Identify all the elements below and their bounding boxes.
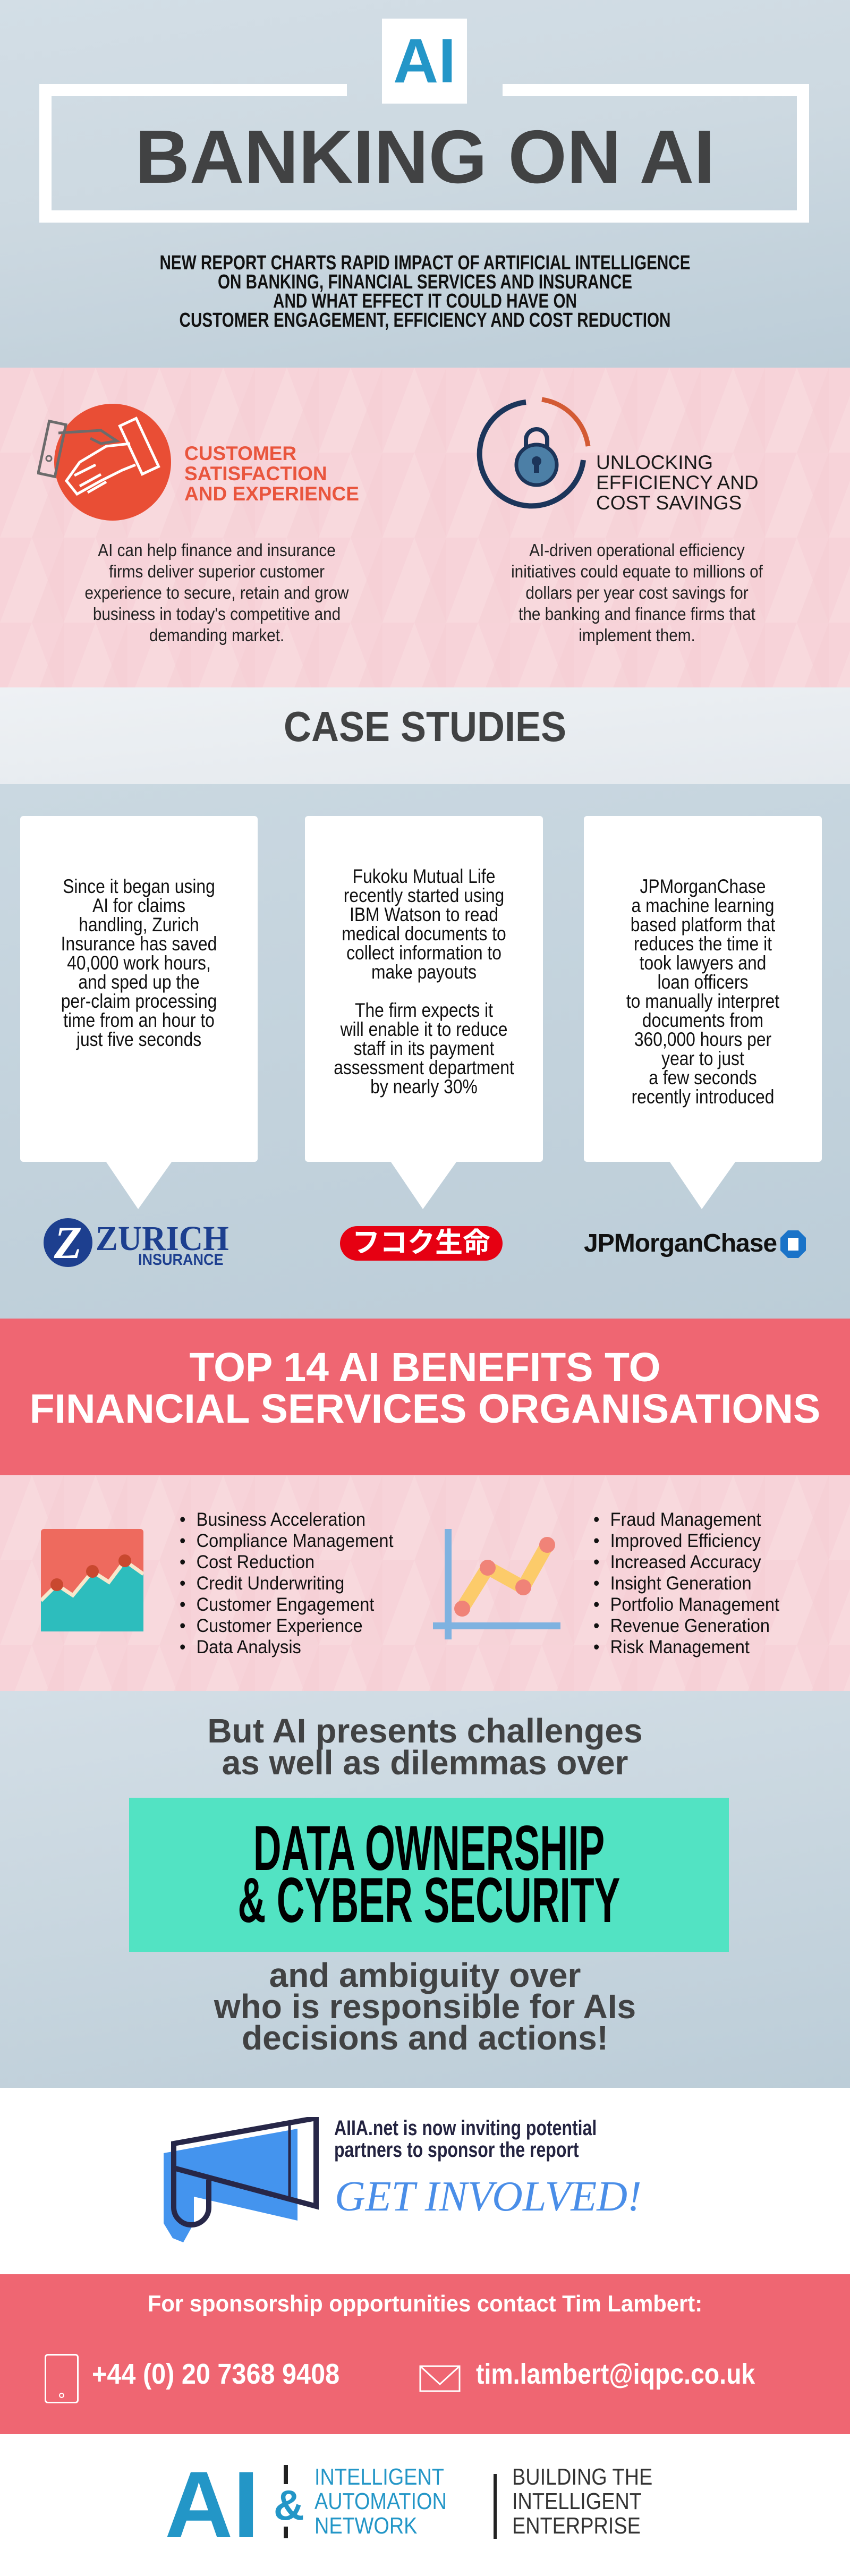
text: fukoku case: assessment department: [334, 1057, 514, 1078]
text: sponsor invite: AIIA.net is now inviting potential: [334, 2116, 597, 2140]
text: customer body: demanding market.: [149, 625, 284, 645]
logo: intelligent automation network: &: [274, 2481, 304, 2529]
list: benefits right: •: [593, 1616, 599, 1636]
text: get involved: GET INVOLVED!: [335, 2173, 642, 2220]
text: fukoku case: IBM Watson to read: [350, 904, 498, 925]
text: sponsor invite: partners to sponsor the report: [334, 2138, 579, 2162]
text: zurich case: time from an hour to: [63, 1009, 215, 1031]
text: zurich case: AI for claims: [92, 895, 185, 916]
text: customer body: business in today's competitive and: [93, 604, 341, 624]
heading: unlocking efficiency: [596, 452, 759, 514]
text: jpmorgan case: took lawyers and: [640, 952, 766, 974]
text: zurich case: [61, 875, 217, 1050]
list: benefits right: Portfolio Management: [610, 1594, 779, 1615]
text: efficiency body: [511, 540, 763, 645]
list: benefits right: •: [593, 1637, 599, 1657]
heading: top 14 benefits: FINANCIAL SERVICES ORGANISATIONS: [30, 1386, 820, 1432]
text: challenges outro: who is responsible for AIs: [214, 1987, 636, 2026]
logo: zurich: ZURICH: [96, 1219, 229, 1258]
list: benefits left: •: [180, 1594, 185, 1615]
callout: data ownership box: DATA OWNERSHIP: [253, 1813, 605, 1884]
text: zurich case: per-claim processing: [61, 990, 217, 1012]
text: efficiency body: AI-driven operational efficiency: [529, 540, 745, 560]
text: efficiency body: the banking and finance firms that: [518, 604, 755, 624]
text: efficiency body: implement them.: [579, 625, 695, 645]
text: jpmorgan case: documents from: [642, 1009, 763, 1031]
text: zurich case: 40,000 work hours,: [67, 952, 211, 974]
section: case studies header band: [0, 687, 850, 784]
text: jpmorgan case: JPMorganChase: [640, 875, 766, 897]
logo: AI box: [382, 19, 467, 104]
title: BANKING ON AI: [135, 115, 715, 199]
icon: handshake: [37, 404, 171, 521]
heading: unlocking efficiency: EFFICIENCY AND: [596, 472, 759, 494]
subtitle: CUSTOMER ENGAGEMENT, EFFICIENCY AND COST REDUCTION: [180, 309, 670, 331]
subtitle: AND WHAT EFFECT IT COULD HAVE ON: [273, 290, 577, 312]
list: benefits right: Risk Management: [610, 1637, 750, 1657]
heading: unlocking efficiency: UNLOCKING: [596, 452, 713, 473]
text: jpmorgan case: year to just: [661, 1048, 744, 1069]
heading: customer satisfaction: SATISFACTION: [184, 463, 327, 484]
icon: line graph: [433, 1529, 560, 1639]
logo: intelligent automation network: AUTOMATION: [314, 2488, 447, 2514]
logo: intelligent automation network: NETWORK: [314, 2513, 417, 2539]
list: benefits right: Insight Generation: [610, 1573, 752, 1594]
logo: jpmorgan chase: JPMorganChase: [584, 1229, 777, 1257]
list: benefits right: Increased Accuracy: [610, 1552, 761, 1572]
list: benefits left: [180, 1509, 394, 1657]
text: zurich case: handling, Zurich: [79, 914, 199, 936]
text: challenges intro: [207, 1712, 643, 1782]
subtitle: [160, 252, 690, 331]
text: sponsor invite: [334, 2116, 597, 2162]
text: fukoku case: by nearly 30%: [370, 1076, 478, 1098]
section: header background: [0, 0, 850, 368]
list: benefits left: Business Acceleration: [197, 1509, 366, 1530]
list: benefits left: Credit Underwriting: [197, 1573, 344, 1594]
text: fukoku case: make payouts: [371, 961, 477, 983]
card: fukoku: [305, 816, 543, 1209]
text: phone number: +44 (0) 20 7368 9408: [92, 2358, 339, 2390]
text: customer body: experience to secure, retain and grow: [85, 583, 348, 602]
text: fukoku case: Fukoku Mutual Life: [353, 865, 495, 887]
text: challenges outro: decisions and actions!: [242, 2019, 608, 2057]
heading: customer satisfaction: [184, 443, 359, 505]
text: jpmorgan case: [626, 875, 779, 1108]
list: benefits right: •: [593, 1552, 599, 1572]
heading: customer satisfaction: CUSTOMER: [184, 443, 296, 464]
card: zurich: [20, 816, 258, 1209]
text: contact heading: For sponsorship opportunities contact Tim Lambert:: [148, 2291, 702, 2317]
list: benefits left: •: [180, 1552, 185, 1572]
text: zurich case: Insurance has saved: [61, 933, 217, 955]
list: benefits right: Revenue Generation: [610, 1616, 770, 1636]
text: challenges outro: [214, 1956, 636, 2057]
text: fukoku case: [334, 865, 514, 1098]
logo: zurich: [44, 1217, 229, 1269]
logo: intelligent automation network: INTELLIGENT: [314, 2464, 444, 2490]
text: zurich case: Since it began using: [63, 875, 215, 897]
text: customer body: AI can help finance and insurance: [98, 540, 336, 560]
list: benefits left: Customer Experience: [197, 1616, 363, 1636]
logo: AI box: AI: [393, 26, 456, 96]
icon: email: [420, 2365, 460, 2392]
callout: data ownership box: [129, 1798, 729, 1952]
logo: zurich: INSURANCE: [138, 1251, 224, 1269]
text: fukoku case: The firm expects it: [355, 999, 493, 1021]
text: efficiency body: dollars per year cost savings for: [525, 583, 749, 602]
list: benefits right: •: [593, 1573, 599, 1594]
list: benefits left: •: [180, 1573, 185, 1594]
text: fukoku case: medical documents to: [342, 923, 506, 945]
text: email: tim.lambert@iqpc.co.uk: [476, 2358, 755, 2390]
list: benefits right: Fraud Management: [610, 1509, 761, 1530]
icon: area chart: [41, 1529, 143, 1631]
logo: fukoku: フコク生命: [352, 1228, 490, 1259]
text: challenges outro: and ambiguity over: [269, 1956, 581, 1994]
list: benefits left: Data Analysis: [197, 1637, 301, 1657]
text: jpmorgan case: reduces the time it: [634, 933, 772, 955]
text: jpmorgan case: based platform that: [631, 914, 775, 936]
list: benefits right: •: [593, 1531, 599, 1551]
section: top 14 red band: [0, 1319, 850, 1475]
logo: zurich: Z: [54, 1217, 82, 1268]
list: benefits left: Cost Reduction: [197, 1552, 314, 1572]
list: benefits right: •: [593, 1509, 599, 1530]
icon: lock: [477, 397, 591, 509]
section: challenges background: [0, 1691, 850, 2088]
logo: intelligent automation network: BUILDING THE: [512, 2464, 652, 2490]
logo: intelligent automation network: AI: [165, 2452, 259, 2557]
title frame: [39, 84, 809, 223]
text: zurich case: just five seconds: [76, 1028, 201, 1050]
section: benefits pink background: [0, 368, 850, 687]
text: fukoku case: recently started using: [344, 885, 504, 906]
card: jpmorgan: [584, 816, 822, 1209]
text: efficiency body: initiatives could equate to millions of: [511, 562, 763, 581]
list: benefits left: •: [180, 1637, 185, 1657]
text: jpmorgan case: a machine learning: [632, 895, 774, 916]
text: jpmorgan case: loan officers: [657, 971, 748, 993]
heading: case studies: CASE STUDIES: [284, 703, 566, 750]
list: benefits left: •: [180, 1616, 185, 1636]
list: benefits left: •: [180, 1509, 185, 1530]
logo: intelligent automation network: ENTERPRISE: [512, 2513, 641, 2539]
list: benefits left: Customer Engagement: [197, 1594, 374, 1615]
callout: data ownership box: & CYBER SECURITY: [238, 1865, 620, 1936]
heading: top 14 benefits: [30, 1345, 820, 1432]
text: customer body: [85, 540, 348, 645]
icon: phone: [45, 2354, 79, 2403]
logo: intelligent automation network: INTELLIGENT: [512, 2488, 642, 2514]
list: benefits left: Compliance Management: [197, 1531, 394, 1551]
section: case studies background: [0, 784, 850, 1319]
text: challenges intro: But AI presents challenges: [207, 1712, 643, 1750]
heading: unlocking efficiency: COST SAVINGS: [596, 492, 742, 514]
text: fukoku case: will enable it to reduce: [341, 1018, 507, 1040]
section: contact red band: [0, 2274, 850, 2434]
text: jpmorgan case: to manually interpret: [626, 990, 779, 1012]
text: jpmorgan case: 360,000 hours per: [634, 1028, 771, 1050]
section: benefits list pink background: [0, 1475, 850, 1691]
list: benefits right: •: [593, 1594, 599, 1615]
icon: megaphone: [164, 2117, 319, 2242]
heading: customer satisfaction: AND EXPERIENCE: [184, 483, 359, 505]
subtitle: ON BANKING, FINANCIAL SERVICES AND INSURANCE: [218, 271, 632, 293]
subtitle: NEW REPORT CHARTS RAPID IMPACT OF ARTIFICIAL INTELLIGENCE: [160, 252, 690, 274]
text: zurich case: and sped up the: [78, 971, 200, 993]
text: jpmorgan case: recently introduced: [632, 1086, 774, 1108]
logo: intelligent automation network: [165, 2452, 652, 2557]
text: fukoku case: staff in its payment: [354, 1038, 494, 1059]
list: benefits right: Improved Efficiency: [610, 1531, 761, 1551]
list: benefits right: [593, 1509, 779, 1657]
text: challenges intro: as well as dilemmas over: [222, 1744, 628, 1782]
text: customer body: firms deliver superior customer: [109, 562, 325, 581]
list: benefits left: •: [180, 1531, 185, 1551]
heading: top 14 benefits: TOP 14 AI BENEFITS TO: [189, 1345, 661, 1390]
text: jpmorgan case: a few seconds: [649, 1067, 757, 1089]
text: fukoku case: collect information to: [346, 942, 502, 964]
